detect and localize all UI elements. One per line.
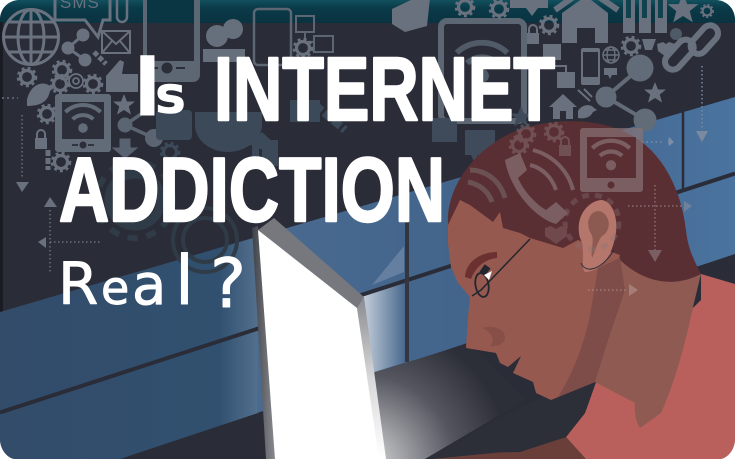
icons overlaid on hair: [468, 123, 692, 296]
icon: binders: [623, 0, 667, 33]
icon: dotted line left edge: [2, 97, 18, 99]
icon: large share: [118, 108, 163, 147]
icon: dotted line, hair: [628, 201, 692, 212]
title: ADDICTION: ADDICTION: [59, 140, 445, 241]
icon: thumbs up: [106, 60, 138, 92]
icon: globe small: [603, 47, 619, 63]
icon: paper clip: [117, 0, 127, 22]
icon: small bubble: [604, 68, 617, 79]
icon: star, top right: [668, 0, 698, 22]
icon: small gears right: [540, 5, 713, 55]
icon: dotted arrow, hair: [648, 185, 662, 262]
icon: small items over hair: [510, 123, 571, 156]
person: face: [448, 200, 620, 400]
title: handwritten Real ?: ?: [210, 245, 246, 324]
icon: chain small: [94, 52, 106, 64]
icon: globe tiny: [670, 28, 682, 40]
person: shirt: [566, 274, 735, 459]
icon: gear behind ear: [565, 195, 619, 249]
person: neck: [595, 240, 701, 428]
title: [58, 40, 555, 324]
icon: SMS speech bubble: [55, 0, 110, 37]
icon: cart and heart: [642, 39, 676, 57]
icon: star, right: [644, 82, 666, 102]
person: dark torso shadow: [425, 372, 596, 459]
person: glasses: [472, 239, 530, 298]
icon: gears cluster: [18, 61, 102, 171]
icon: download tray: [113, 139, 137, 160]
title: handwritten Real ?: e: [101, 261, 129, 315]
icon: wifi arcs over hair: [468, 170, 505, 202]
background icons collage: [2, 0, 721, 274]
icon: dotted arrow left: [38, 237, 100, 248]
icon: network boxes: [294, 16, 333, 57]
icon: smartphone: [143, 0, 200, 82]
icon: chain link: [46, 150, 50, 170]
window panes: [0, 97, 735, 459]
person: ear: [579, 200, 616, 272]
icon: right dotted arrow: [696, 66, 708, 142]
desk glow: [362, 343, 525, 459]
icon: faded row near title end: [432, 106, 532, 162]
icon: wifi tablet, top centre: [441, 21, 524, 121]
icon: telephone handset: [505, 153, 568, 224]
teal top band: [0, 0, 735, 23]
person: [425, 121, 735, 459]
icon: phones small curve: [578, 89, 592, 101]
icon: call arcs: [530, 150, 573, 190]
icon: dotted arrow down: [16, 115, 29, 192]
icon: chain links, large: [662, 22, 721, 73]
icon: large house: [555, 0, 618, 43]
title: INTERNET: INTERNET: [214, 40, 555, 140]
icon: phone outline: [254, 9, 291, 65]
icon: padlock and boxes: [527, 25, 575, 88]
icon: at sign: [69, 74, 83, 88]
person: eyebrow: [465, 252, 497, 279]
dark left edge: [0, 22, 3, 442]
person: hair back: [448, 121, 701, 282]
faded large gear and rings: [97, 162, 237, 272]
icon: heart over hair: [545, 226, 567, 244]
title: handwritten Real ?: l: [175, 242, 194, 321]
glowing monitor: [252, 218, 386, 459]
icon: phone small: [581, 48, 600, 85]
icon: dotted arrow, neck: [588, 284, 638, 296]
icon: dotted arrow up: [44, 197, 57, 274]
title: handwritten Is: l: [134, 44, 161, 134]
person: jaw shadow band: [558, 258, 625, 397]
icon: share small: [62, 28, 92, 66]
title: handwritten Is: s: [155, 66, 186, 126]
person: arm sliver: [432, 437, 586, 459]
title: handwritten Real ?: a: [132, 253, 166, 318]
icon: large share network: [596, 54, 656, 132]
icon: users: [203, 19, 245, 62]
icon: small house and bird: [549, 94, 597, 119]
icon: bird: [27, 84, 54, 106]
icon: tablet over hair: [580, 128, 643, 192]
icon: padlock: [35, 130, 47, 149]
icon: top centre cluster: [392, 0, 548, 32]
icon: wifi tablet: [55, 94, 111, 152]
icon: globe: [4, 9, 58, 65]
title: handwritten Real ?: R: [58, 250, 98, 318]
icon: star: [113, 94, 135, 114]
person: lips shadow: [482, 327, 505, 346]
icon: right dotted line: [642, 137, 674, 146]
faded mid icons: [156, 100, 345, 166]
icon: envelope: [102, 31, 130, 53]
